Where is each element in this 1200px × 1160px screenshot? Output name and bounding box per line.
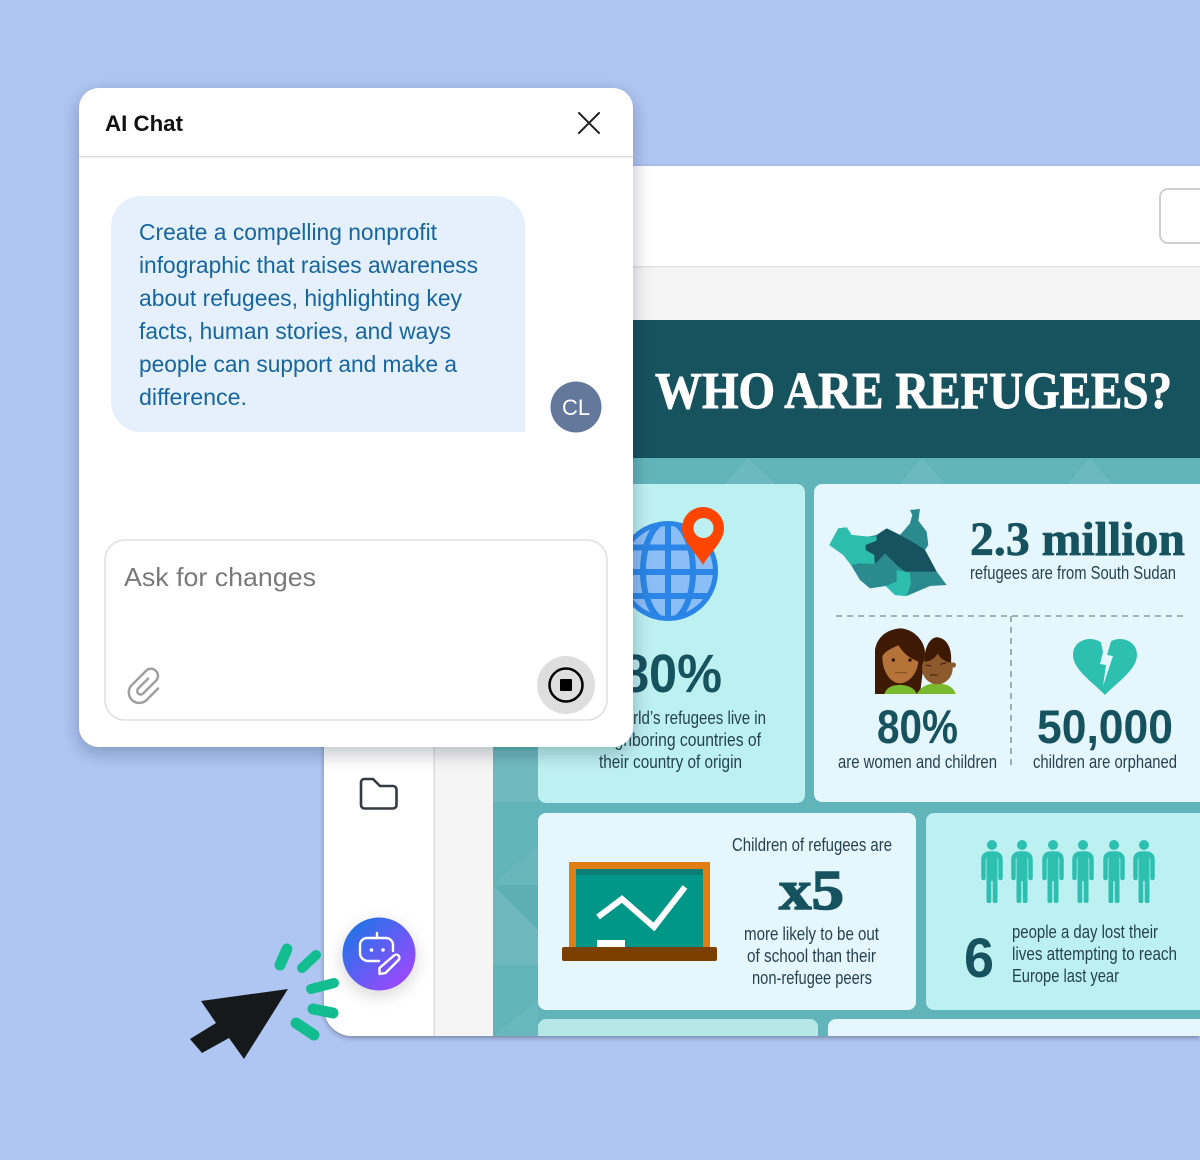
cards: cut off bottom row bbox=[538, 1019, 1200, 1036]
left sidebar bbox=[326, 747, 435, 1036]
icon: broken heart bbox=[1073, 638, 1137, 695]
AI chat panel bbox=[79, 88, 633, 747]
user message bubble: about refugees, highlighting key bbox=[139, 285, 462, 311]
card: lives lost bbox=[926, 813, 1200, 1010]
text: children of refugees: Children of refugees are bbox=[732, 835, 892, 855]
stat: 80%: 80% bbox=[621, 644, 722, 704]
text: people a day: people a day lost their bbox=[1012, 922, 1158, 942]
text: more likely bbox=[744, 924, 879, 988]
icon: six people bbox=[984, 840, 1152, 903]
header band bbox=[633, 320, 1200, 458]
user message bubble: infographic that raises awareness bbox=[139, 252, 478, 278]
stat: 50,000: 50,000 bbox=[1037, 700, 1173, 753]
text: more likely: more likely to be out bbox=[744, 924, 879, 944]
icon: chalkboard bbox=[562, 862, 717, 961]
user message bubble bbox=[111, 196, 525, 432]
top toolbar bbox=[633, 188, 1200, 268]
description: their country of origin bbox=[599, 752, 742, 772]
stat: 6: 6 bbox=[964, 926, 994, 989]
panel title: AI Chat bbox=[105, 111, 184, 136]
editor canvas area bbox=[435, 267, 1200, 1036]
infographic page bbox=[493, 320, 1200, 1059]
icon: paperclip bbox=[124, 666, 166, 707]
stat: x5: x5 bbox=[779, 860, 844, 922]
user message bubble: difference. bbox=[139, 384, 247, 410]
stat: 80%: 80% bbox=[877, 700, 958, 753]
user avatar bbox=[550, 382, 602, 432]
icon: woman and child bbox=[875, 628, 956, 694]
user message bubble: people can support and make a bbox=[139, 351, 458, 377]
icon: cursor arrow bbox=[190, 989, 288, 1059]
user message bubble: facts, human stories, and ways bbox=[139, 318, 451, 344]
input box bbox=[105, 540, 607, 720]
user avatar: CL bbox=[562, 395, 590, 420]
description bbox=[599, 710, 766, 772]
description: of the world’s refugees live in bbox=[572, 708, 766, 728]
icon: robot with pencil bbox=[360, 933, 399, 974]
map: South Sudan bbox=[829, 509, 947, 596]
AI button bbox=[342, 918, 416, 990]
text: more likely: of school than their bbox=[747, 946, 876, 966]
user message bubble: Create a compelling nonprofit bbox=[139, 219, 437, 245]
text: more likely: non-refugee peers bbox=[752, 968, 872, 988]
text: people a day: Europe last year bbox=[1012, 966, 1119, 986]
icon: close bbox=[579, 113, 599, 133]
text: people a day bbox=[1012, 922, 1177, 986]
panel header bbox=[79, 111, 633, 158]
card: out of school bbox=[538, 813, 916, 1010]
icon: globe with pin bbox=[633, 507, 724, 621]
card: South Sudan stats bbox=[814, 484, 1200, 802]
placeholder text: Ask for changes bbox=[124, 562, 316, 592]
description: in neighboring countries of bbox=[577, 730, 762, 750]
text: women and children: are women and children bbox=[838, 752, 997, 772]
editor window bbox=[324, 166, 1200, 1059]
icon: click sparks bbox=[280, 949, 334, 1035]
icon: folder bbox=[361, 779, 396, 808]
card: neighbouring countries bbox=[538, 484, 805, 803]
stat: 2.3 million: 2.3 million bbox=[970, 513, 1185, 566]
stop button bbox=[537, 656, 595, 714]
